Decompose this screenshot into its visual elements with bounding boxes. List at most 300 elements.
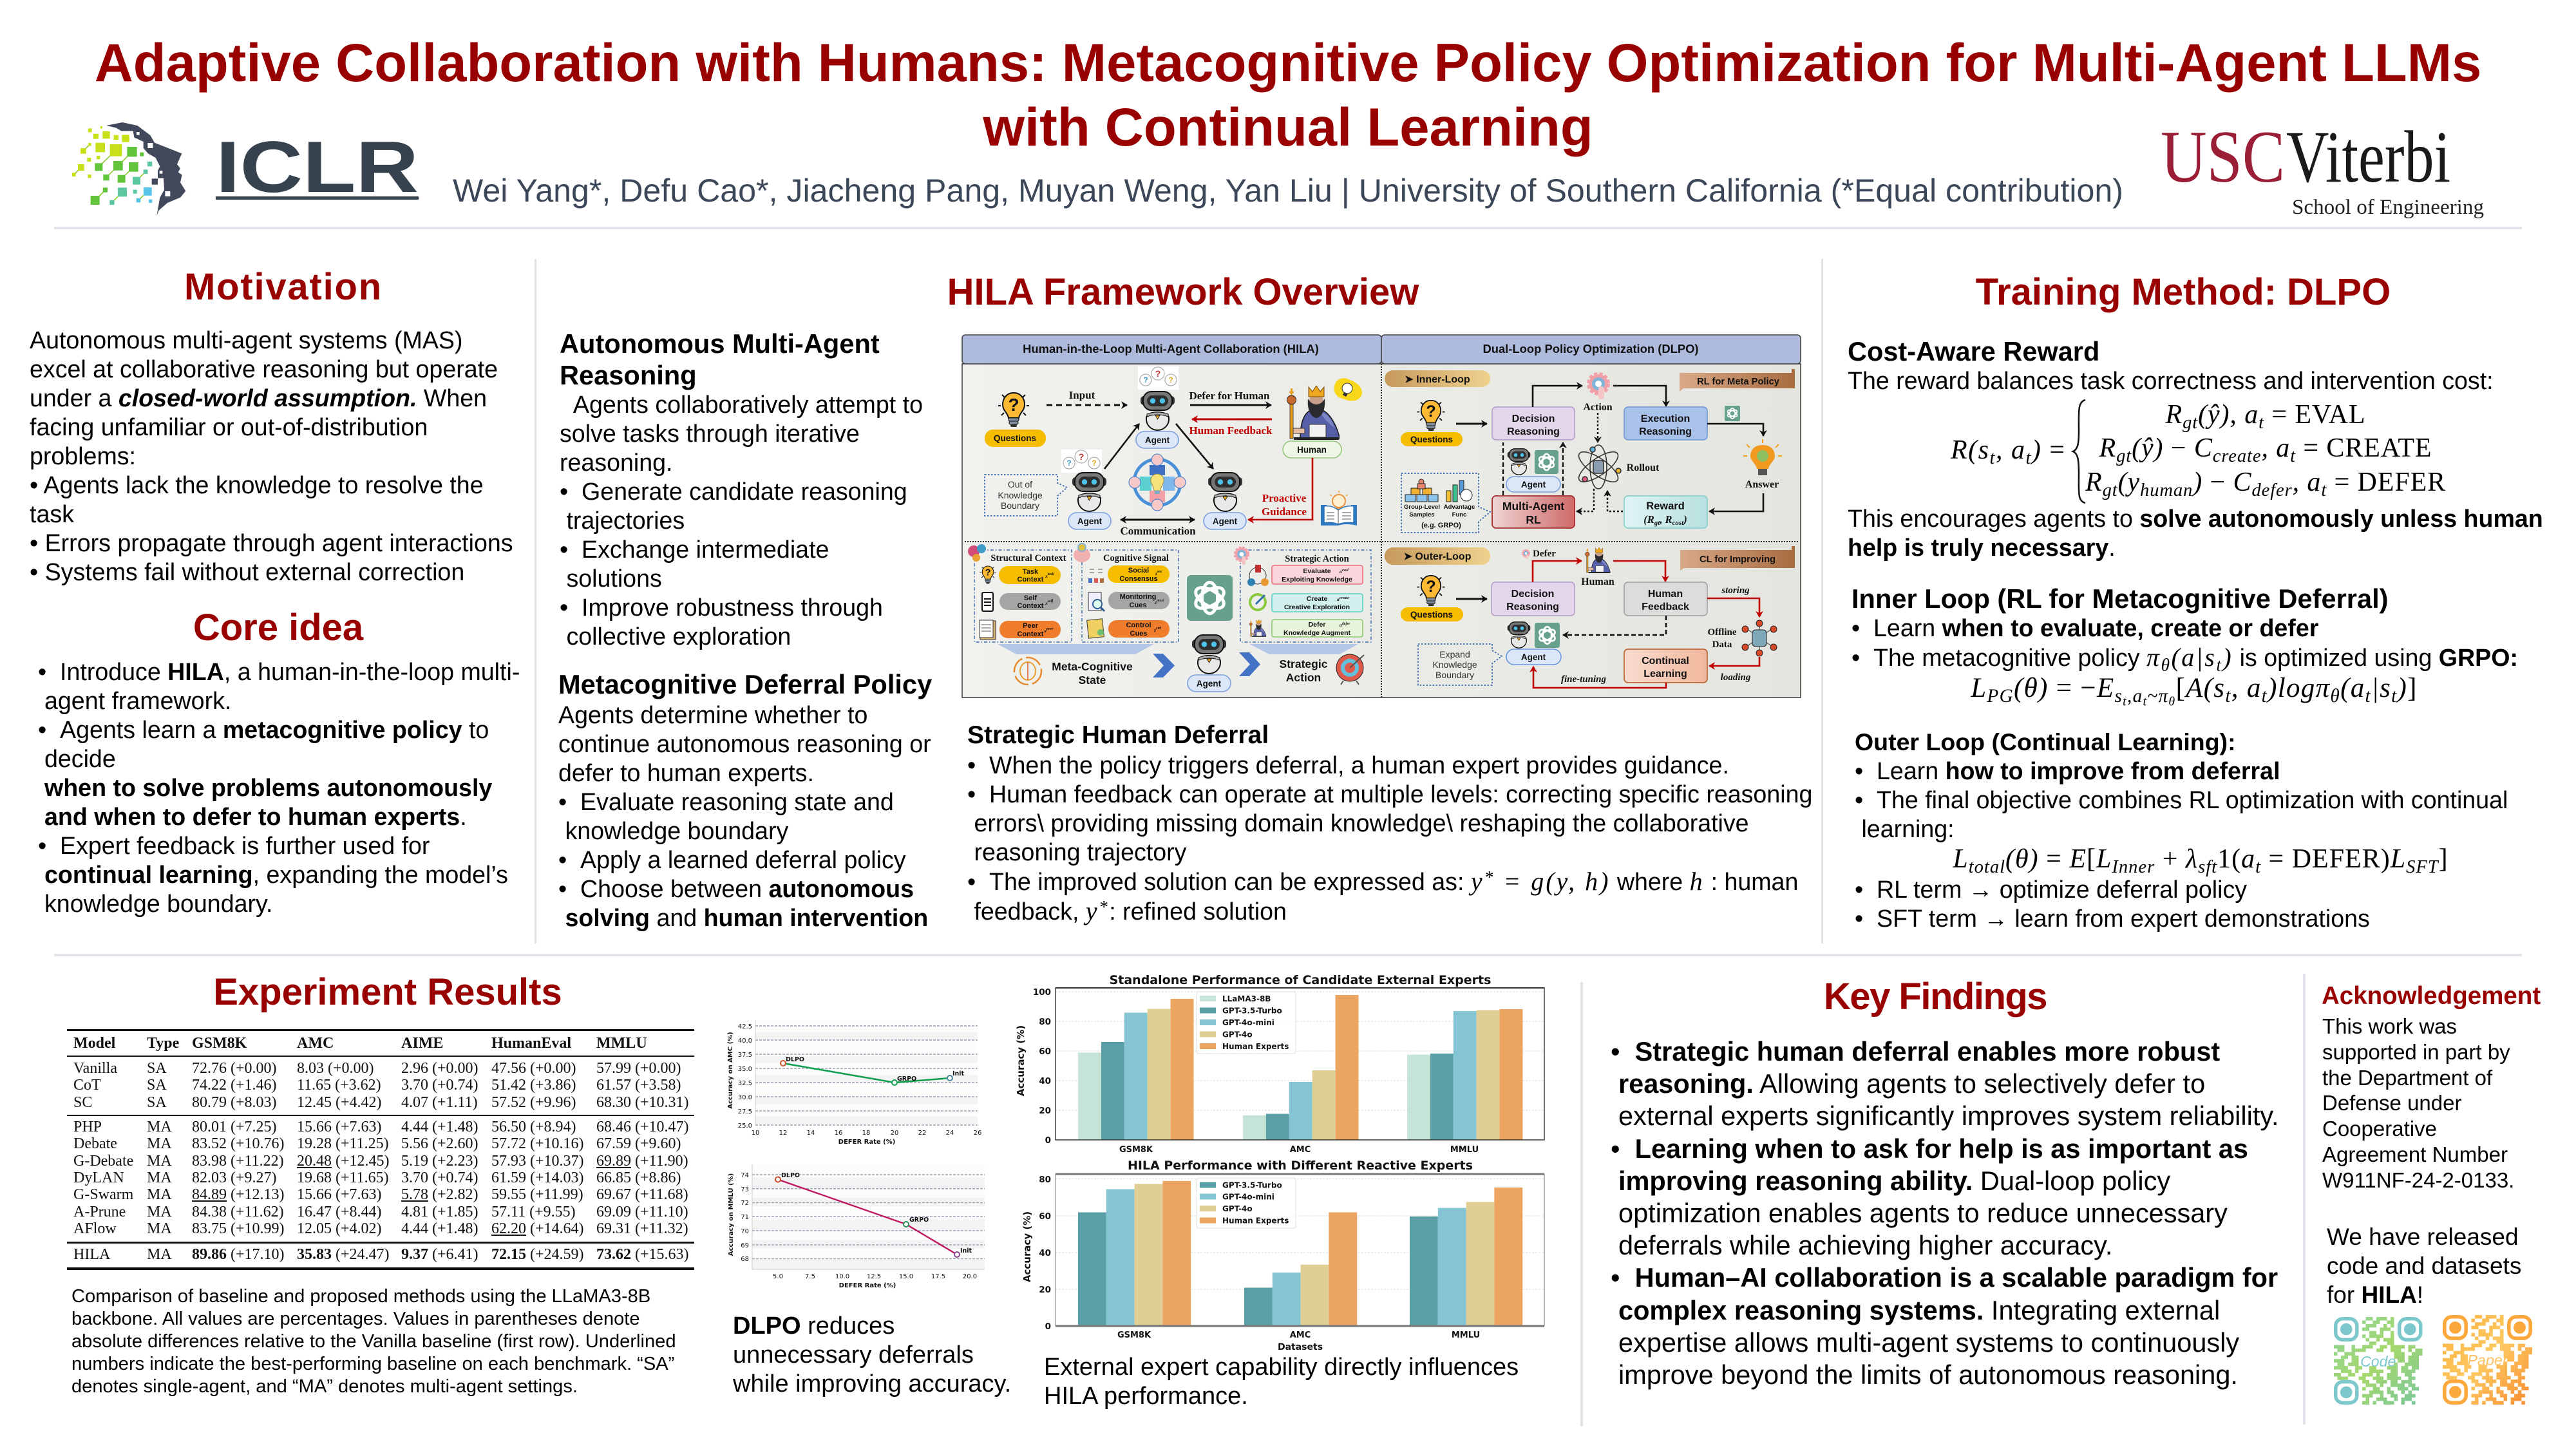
box: reward: (R	[1643, 513, 1654, 526]
table: benchmark results: 80.01 (+7.25)	[192, 1119, 277, 1135]
header: DLPO: Dual-Loop Policy Optimization (DLPO)	[1482, 342, 1699, 355]
pill: monitoring cues: Monitoring	[1120, 593, 1156, 601]
text: key findings: external experts significantly improves system reliability.	[1618, 1101, 2279, 1131]
table: benchmark results: 15.66 (+7.63)	[297, 1119, 382, 1135]
label: meta-cognitive state: State	[1079, 674, 1106, 687]
text: autonomous multi-agent reasoning: Autonomous Multi-Agent	[560, 328, 880, 359]
action: evaluate: a	[1340, 569, 1342, 574]
pill: task context: task	[1048, 573, 1054, 576]
label: proactive guidance	[1262, 492, 1307, 518]
arrow: to reward	[1709, 493, 1763, 511]
text: motivation body	[30, 327, 513, 585]
icon: thoughts	[1138, 366, 1179, 390]
text: acknowledgement body: Defense under	[2322, 1091, 2461, 1115]
heading: Key Findings: Key Findings	[1824, 976, 2047, 1018]
agent: left: Agent	[1077, 516, 1103, 526]
qr codes: code and paper	[2325, 1307, 2541, 1414]
table: benchmark results: 59.55 (+11.99)	[491, 1186, 583, 1203]
text: motivation body: facing unfamiliar or out-of-distribution	[30, 413, 428, 440]
text: metacognitive deferral policy: Agents determine whether to	[558, 701, 867, 728]
callout: knowledge boundary: Knowledge	[998, 490, 1043, 500]
divider	[54, 954, 2522, 956]
line chart: accuracy on AMC vs defer rate: 14	[807, 1130, 815, 1137]
label: proactive guidance: Guidance	[1262, 506, 1307, 518]
table: benchmark results: 69.09 (+11.10)	[596, 1204, 688, 1220]
callout: GRPO samples	[1401, 473, 1490, 533]
line chart: accuracy on AMC vs defer rate: 24	[946, 1130, 954, 1137]
arrow: feedback to agent	[1563, 616, 1666, 635]
pill: Inner-Loop	[1385, 370, 1490, 387]
pill: Human: Human	[1297, 445, 1327, 455]
table: benchmark results: 74.22 (+1.46)	[192, 1077, 277, 1094]
table: benchmark results: 4.44 (+1.48)	[401, 1119, 478, 1135]
callout: GRPO samples: (e.g. GRPO)	[1421, 522, 1461, 529]
box: structural context: Structural Context	[990, 553, 1066, 564]
icon: head gears	[968, 544, 986, 562]
text: autonomous multi-agent reasoning: Reasoning	[560, 360, 697, 390]
icon: rollout atom	[1575, 445, 1622, 489]
logo: ICLR	[72, 122, 419, 216]
label: answer: Answer	[1745, 479, 1779, 490]
line chart: accuracy on AMC vs defer rate: 18	[862, 1130, 870, 1137]
table: benchmark results: SC	[73, 1094, 92, 1111]
text: core idea body: continual learning, expanding the model’s	[44, 861, 508, 888]
callout: GRPO samples: Advantage	[1444, 504, 1475, 511]
box: strategic action	[1240, 550, 1371, 642]
bar chart: standalone performance: LLaMA3-8B	[1222, 994, 1271, 1003]
line chart: accuracy on MMLU vs defer rate: 20.0	[963, 1273, 977, 1280]
action: create: Create	[1307, 595, 1328, 603]
line chart: accuracy on MMLU vs defer rate: 10.0	[835, 1273, 849, 1280]
box: decision reasoning: Reasoning	[1507, 426, 1560, 437]
table: benchmark results: MA	[147, 1153, 172, 1170]
heading: Motivation: Motivation	[184, 266, 383, 308]
panel: HILA collaboration	[985, 366, 1362, 537]
text: outer loop: • The final objective combines RL optimization with continual	[1855, 786, 2508, 813]
pill: task context: Context	[1018, 576, 1044, 583]
pill: monitoring cues: z	[1155, 600, 1157, 605]
box: cognitive signal	[1082, 550, 1179, 642]
table: benchmark results: 11.65 (+3.62)	[297, 1077, 381, 1094]
wordmark: ICLR: ICLR	[216, 126, 419, 207]
box: human feedback: Feedback	[1642, 601, 1689, 612]
arrow: action to rollout	[1597, 413, 1598, 442]
action: defer: defer	[1342, 622, 1350, 626]
bar chart: HILA performance with reactive experts: Datasets	[1278, 1342, 1323, 1352]
table: benchmark results: 84.38 (+11.62)	[192, 1204, 284, 1220]
table: benchmark results: 4.81 (+1.85)	[401, 1204, 478, 1220]
line chart: accuracy on AMC vs defer rate: 16	[835, 1130, 842, 1137]
line chart: accuracy on AMC vs defer rate: 42.5	[738, 1023, 752, 1030]
bar chart: standalone performance: Accuracy (%)	[1015, 1025, 1027, 1096]
arrow: chevron	[1153, 654, 1175, 677]
text: metacognitive deferral policy: solving and human intervention	[565, 904, 928, 931]
heading: Experiment Results: Experiment Results	[213, 971, 562, 1013]
table: benchmark results: 9.37 (+6.41)	[401, 1246, 478, 1263]
diagram: HILA and DLPO framework	[961, 334, 1801, 698]
pill: control cues: z	[1154, 627, 1156, 633]
pill: Outer-Loop: ➤ Outer-Loop	[1404, 551, 1472, 562]
arrow: rollout to RL	[1577, 489, 1594, 511]
formula: reward: Rgt(ŷ), at = EVAL	[2165, 400, 2366, 433]
arrow: reward to rollout	[1607, 491, 1623, 511]
agent: outer	[1506, 622, 1561, 665]
line chart: accuracy on MMLU vs defer rate: 70	[741, 1228, 749, 1235]
table: benchmark results: PHP	[73, 1119, 102, 1135]
text: motivation body: problems:	[30, 442, 136, 469]
box: continual learning: Learning	[1643, 668, 1687, 679]
table: benchmark results: 5.78 (+2.82)	[401, 1186, 478, 1203]
text: autonomous multi-agent reasoning: collective exploration	[566, 623, 791, 650]
pill: control cues: ctrl	[1156, 627, 1162, 630]
line chart: accuracy on AMC vs defer rate: 27.5	[738, 1108, 752, 1115]
pill: Questions	[985, 430, 1046, 447]
icon: collaboration circle	[1129, 454, 1186, 511]
table: benchmark results: MA	[147, 1186, 172, 1203]
icon: gear	[1235, 547, 1248, 565]
table: benchmark results: 12.05 (+4.02)	[297, 1220, 382, 1237]
text: outer loop: • Learn how to improve from deferral	[1855, 757, 2280, 784]
icon: document	[982, 592, 993, 611]
arrow: input	[1046, 389, 1127, 405]
label: rollout: Rollout	[1627, 462, 1660, 473]
bar chart: HILA performance with reactive experts: GSM8K	[1117, 1331, 1151, 1340]
box: execution reasoning	[1624, 407, 1707, 440]
text: DLPO summary: unnecessary deferrals	[733, 1341, 974, 1368]
table: benchmark results: 80.79 (+8.03)	[192, 1094, 277, 1111]
text: expert capability caption: External expert capability directly influences	[1044, 1354, 1519, 1381]
arrow: loading	[1709, 657, 1759, 666]
box: structural context	[974, 550, 1072, 642]
table: benchmark results: 51.42 (+3.86)	[491, 1077, 576, 1094]
label: offline data: Data	[1712, 639, 1732, 650]
text: outer loop	[1855, 727, 2508, 844]
box: execution reasoning: Reasoning	[1639, 426, 1692, 437]
arrow: to decision	[1456, 598, 1487, 600]
text: key findings: • Strategic human deferral enables more robust	[1611, 1036, 2220, 1066]
box: multi-agent RL	[1492, 496, 1575, 528]
table: benchmark results	[0, 0, 708, 1272]
text: core idea body: • Agents learn a metacognitive policy to	[38, 716, 489, 743]
title	[95, 33, 2481, 157]
table: benchmark results: 57.93 (+10.37)	[491, 1153, 584, 1170]
label: storing: storing	[1721, 585, 1750, 596]
arrow: defer for human: Defer for Human	[1189, 390, 1270, 402]
pill: peer context: peer	[1046, 627, 1054, 631]
action: defer	[1272, 620, 1363, 637]
table: benchmark results: 20.48 (+12.45)	[297, 1153, 390, 1170]
text: motivation body: • Errors propagate through agent interactions	[30, 529, 513, 556]
table: benchmark results: 89.86 (+17.10)	[192, 1246, 285, 1263]
text: motivation body: task	[30, 500, 74, 527]
line chart: accuracy on MMLU vs defer rate	[721, 1159, 992, 1291]
pill: monitoring cues: mon	[1157, 599, 1164, 603]
bar chart: HILA performance with reactive experts: GPT-3.5-Turbo	[1222, 1181, 1282, 1190]
text: key findings: improving reasoning ability. Dual-loop policy	[1618, 1166, 2170, 1196]
text: autonomous multi-agent reasoning: solve tasks through iterative	[560, 420, 860, 447]
table: benchmark results: 47.56 (+0.00)	[491, 1060, 576, 1077]
label: action: Action	[1583, 402, 1613, 413]
line chart: accuracy on MMLU vs defer rate: 71	[741, 1214, 749, 1221]
heading: HILA Framework Overview: HILA Framework Overview	[947, 271, 1419, 313]
bar chart: HILA performance with reactive experts	[1011, 1156, 1552, 1352]
pill: peer context: x	[1044, 628, 1046, 634]
bar chart: standalone performance	[1011, 969, 1552, 1156]
table: benchmark results: A-Prune	[73, 1204, 126, 1220]
agent: inner: Agent	[1521, 480, 1546, 489]
table: benchmark results: CoT	[73, 1077, 101, 1094]
text: metacognitive deferral policy: • Apply a learned deferral policy	[558, 846, 906, 873]
table: benchmark results: 5.19 (+2.23)	[401, 1153, 478, 1170]
text: strategic human deferral: Strategic Human Deferral	[967, 721, 1269, 749]
table: benchmark results: 4.07 (+1.11)	[401, 1094, 478, 1111]
qr: paper	[2443, 1317, 2532, 1403]
arrow: communication: Communication	[1120, 525, 1196, 537]
agent: top	[1136, 392, 1179, 448]
icon: human king	[1585, 547, 1610, 573]
pill: social consensus: soc	[1157, 570, 1162, 574]
line chart: accuracy on MMLU vs defer rate: 17.5	[931, 1273, 945, 1280]
text: DLPO summary	[733, 1312, 1011, 1399]
arrows: RL to decision	[1503, 442, 1563, 495]
bar chart: standalone performance: 0	[1045, 1135, 1051, 1146]
action: evaluate: Exploiting Knowledge	[1282, 576, 1352, 583]
text: motivation body: • Systems fail without external correction	[30, 558, 464, 585]
icon: magnifier	[1088, 592, 1104, 611]
authors: Wei Yang*, Defu Cao*, Jiacheng Pang, Muyan Weng, Yan Liu | University of Southern California (*Equal contribution)	[453, 173, 2123, 209]
box: decision reasoning	[1492, 582, 1575, 616]
table: benchmark results: 69.67 (+11.68)	[596, 1186, 688, 1203]
pill: Questions: Questions	[1410, 435, 1453, 444]
text: strategic human deferral: reasoning trajectory	[974, 838, 1186, 866]
formula: reward: Rgt(yhuman) − Cdefer, at = DEFER	[2085, 468, 2446, 500]
agent: outer: Agent	[1521, 652, 1546, 662]
text: cost-aware reward: The reward balances task correctness and intervention cost:	[1848, 367, 2494, 394]
box: execution reasoning: Execution	[1641, 413, 1690, 424]
text: acknowledgement body: the Department of	[2322, 1066, 2492, 1090]
divider	[1821, 259, 1823, 943]
pill: self context	[999, 593, 1061, 610]
box: continual learning: Continual	[1642, 656, 1689, 667]
text: strategic human deferral	[967, 721, 1812, 925]
text: outer loop: Outer Loop (Continual Learning):	[1855, 728, 2236, 755]
formula: total loss: Ltotal(θ) = E[LInner + λsft1(at = DEFER)LSFT]	[1953, 844, 2448, 877]
header: HILA	[962, 335, 1381, 364]
pill: peer context: Peer	[1023, 622, 1039, 630]
action: defer: Defer	[1309, 621, 1325, 629]
icon: gpt large	[1187, 575, 1233, 621]
text: autonomous multi-agent reasoning: reasoning.	[560, 449, 672, 476]
box: human feedback	[1624, 582, 1707, 616]
text: acknowledgement body: Cooperative	[2322, 1117, 2437, 1141]
label: offline data	[1708, 627, 1737, 650]
table: benchmark results: 83.52 (+10.76)	[192, 1135, 285, 1152]
callout: expand knowledge boundary	[1418, 644, 1502, 685]
agent: right: Agent	[1213, 516, 1238, 526]
icon: clipboard	[980, 620, 996, 639]
text: table caption	[71, 1285, 676, 1398]
trapezoid: action funnel	[1249, 644, 1358, 654]
table: benchmark results: SA	[147, 1094, 167, 1111]
table: benchmark results: GSM8K	[192, 1034, 247, 1051]
text: strategic human deferral: • The improved solution can be expressed as: y* = g(y, h) where h : human	[967, 867, 1798, 896]
arrow: action	[1533, 386, 1582, 407]
table: benchmark results: 67.59 (+9.60)	[596, 1135, 681, 1152]
table: benchmark results: 72.76 (+0.00)	[192, 1060, 277, 1077]
label: meta-cognitive state: Meta-Cognitive	[1052, 660, 1133, 673]
label: strategic action: Action	[1286, 671, 1321, 684]
text: autonomous multi-agent reasoning: solutions	[566, 565, 662, 592]
icon: people	[1088, 569, 1104, 583]
pill: self context: self	[1047, 600, 1054, 603]
line chart: accuracy on MMLU vs defer rate: 68	[741, 1256, 749, 1263]
line chart: accuracy on MMLU vs defer rate: Accuracy on MMLU (%)	[728, 1173, 735, 1256]
icon: question bulb	[998, 393, 1029, 427]
table: benchmark results: 68.30 (+10.31)	[596, 1094, 689, 1111]
pill: task context: x	[1045, 573, 1048, 579]
bar chart: standalone performance: AMC	[1290, 1145, 1311, 1155]
bar chart: standalone performance: MMLU	[1450, 1145, 1479, 1155]
title: Adaptive Collaboration with Humans: Metacognitive Policy Optimization for Multi-Agent LLMs	[95, 33, 2481, 93]
box: reward: Reward	[1646, 500, 1685, 512]
table: benchmark results: SA	[147, 1060, 167, 1077]
box: decision reasoning	[1492, 407, 1575, 440]
pill: peer context: Context	[1018, 630, 1044, 638]
header divider	[54, 227, 2522, 229]
table: benchmark results: 62.20 (+14.64)	[491, 1220, 584, 1237]
table: benchmark results: MA	[147, 1170, 172, 1186]
table: benchmark results: 4.44 (+1.48)	[401, 1220, 478, 1237]
text: metacognitive deferral policy: • Evaluate reasoning state and	[558, 788, 894, 815]
pill: social consensus	[1108, 565, 1170, 583]
table: benchmark results: 82.03 (+9.27)	[192, 1170, 277, 1186]
text: loss terms	[1855, 875, 2370, 933]
bar chart: HILA performance with reactive experts: Accuracy (%)	[1021, 1211, 1033, 1282]
label: meta-cognitive state	[1052, 660, 1133, 687]
box: human feedback: Human	[1648, 589, 1683, 600]
pill: social consensus: Social	[1128, 567, 1149, 574]
pill: Questions: Questions	[1410, 610, 1453, 620]
icon: brain cycle	[1014, 658, 1041, 685]
agent: center	[1188, 635, 1231, 692]
label: fine-tuning: fine-tuning	[1561, 674, 1607, 685]
text: motivation body: excel at collaborative reasoning but operate	[30, 355, 498, 383]
action: defer: a	[1340, 622, 1342, 628]
table: benchmark results: 69.89 (+11.90)	[596, 1153, 688, 1170]
line chart: accuracy on AMC vs defer rate: 25.0	[738, 1122, 752, 1130]
bar chart: HILA performance with reactive experts: 80	[1039, 1175, 1051, 1185]
text: table caption: denotes single-agent, and “MA” denotes multi-agent settings.	[71, 1376, 578, 1397]
icon: small king	[1249, 620, 1266, 637]
text: release note: for HILA!	[2327, 1282, 2423, 1308]
icon: human king	[1287, 386, 1340, 440]
label: strategic action	[1280, 658, 1328, 684]
line chart: accuracy on AMC vs defer rate: GRPO	[897, 1075, 916, 1083]
arrow: human feedback: Human Feedback	[1189, 424, 1273, 437]
bar chart: standalone performance: Human Experts	[1222, 1042, 1289, 1051]
box: strategic action: Strategic Action	[1285, 554, 1349, 564]
line chart: accuracy on AMC vs defer rate: 35.0	[738, 1066, 752, 1073]
bar chart: standalone performance: 100	[1033, 987, 1051, 998]
label: defer: Defer	[1533, 549, 1556, 559]
callout: expand knowledge boundary: Boundary	[1435, 670, 1474, 680]
line chart: accuracy on MMLU vs defer rate: GRPO	[909, 1217, 929, 1224]
box: decision reasoning: Decision	[1512, 413, 1555, 424]
divider	[2303, 974, 2306, 1425]
text: table caption: numbers indicate the best-performing baseline on each benchmark. “SA”	[71, 1354, 674, 1374]
table: benchmark results: Debate	[73, 1135, 117, 1152]
table: benchmark results: Type	[147, 1034, 179, 1051]
table: benchmark results: Model	[73, 1034, 115, 1051]
text: key findings: • Human–AI collaboration is a scalable paradigm for	[1611, 1262, 2278, 1293]
line chart: accuracy on AMC vs defer rate: 30.0	[738, 1094, 752, 1101]
formula: reward: Rgt(ŷ) − Ccreate, at = CREATE	[2099, 433, 2432, 466]
icon: hands	[1247, 565, 1269, 586]
table: benchmark results: 83.75 (+10.99)	[192, 1220, 285, 1237]
line chart: accuracy on MMLU vs defer rate: DEFER Rate (%)	[839, 1282, 896, 1289]
table: benchmark results: 57.99 (+0.00)	[596, 1060, 681, 1077]
text: DLPO summary: DLPO reduces	[733, 1312, 895, 1340]
bar chart: HILA performance with reactive experts: Human Experts	[1222, 1216, 1289, 1225]
text: table caption: Comparison of baseline and proposed methods using the LLaMA3-8B	[71, 1286, 650, 1307]
arrow: defer	[1533, 561, 1582, 582]
pill: self context: Self	[1024, 594, 1037, 602]
text: motivation body: under a closed-world assumption. When	[30, 384, 487, 412]
table: benchmark results: 57.52 (+9.96)	[491, 1094, 576, 1111]
pill: self context: x	[1045, 600, 1048, 606]
bar chart: standalone performance: 80	[1039, 1017, 1051, 1027]
table: benchmark results: AIME	[401, 1034, 443, 1051]
callout: GRPO samples: Group-Level	[1404, 504, 1440, 511]
table: benchmark results: 57.72 (+10.16)	[491, 1135, 584, 1152]
bar chart: HILA performance with reactive experts: 20	[1039, 1285, 1051, 1295]
table: benchmark results: G-Debate	[73, 1153, 133, 1170]
agent: inner	[1506, 449, 1560, 492]
line chart: accuracy on AMC vs defer rate: DLPO	[786, 1056, 804, 1063]
line chart: accuracy on MMLU vs defer rate: 12.5	[867, 1273, 881, 1280]
line chart: accuracy on AMC vs defer rate: Init	[952, 1070, 965, 1077]
line chart: accuracy on MMLU vs defer rate: 72	[741, 1200, 749, 1207]
label: proactive guidance: Proactive	[1262, 492, 1307, 504]
callout: expand knowledge boundary: Knowledge	[1432, 659, 1477, 670]
pill: social consensus: z	[1155, 571, 1157, 576]
text: table caption: backbone. All values are percentages. Values in parentheses denote	[71, 1309, 640, 1329]
arrow: chevron	[1239, 652, 1260, 676]
table: benchmark results: 5.56 (+2.60)	[401, 1135, 478, 1152]
icon: checklist	[1087, 619, 1104, 638]
trapezoid: state funnel	[998, 644, 1154, 654]
agent: right	[1204, 473, 1246, 529]
arrow: input: Input	[1069, 389, 1095, 401]
pill: social consensus: Consensus	[1119, 575, 1158, 583]
text: release note	[2327, 1222, 2521, 1309]
pill: monitoring cues: Cues	[1130, 601, 1146, 609]
arrow: proactive guidance	[1248, 458, 1312, 520]
table: benchmark results: MA	[147, 1204, 172, 1220]
text: metacognitive deferral policy: continue autonomous reasoning or	[558, 730, 931, 757]
text: strategic human deferral: • Human feedback can operate at multiple levels: correcting specific reasoning	[967, 781, 1812, 808]
divider	[1580, 982, 1583, 1426]
text: core idea body: when to solve problems autonomously	[44, 774, 492, 801]
line chart: accuracy on AMC vs defer rate: 37.5	[738, 1052, 752, 1059]
text: expert capability caption	[1044, 1353, 1519, 1411]
arrow: to feedback	[1613, 561, 1665, 582]
text: acknowledgement body: This work was	[2322, 1014, 2457, 1038]
box: decision reasoning: Reasoning	[1506, 601, 1559, 612]
pill: Outer-Loop	[1385, 547, 1490, 565]
table: benchmark results: 8.03 (+0.00)	[297, 1060, 374, 1077]
table: benchmark results: 84.89 (+12.13)	[192, 1186, 285, 1203]
